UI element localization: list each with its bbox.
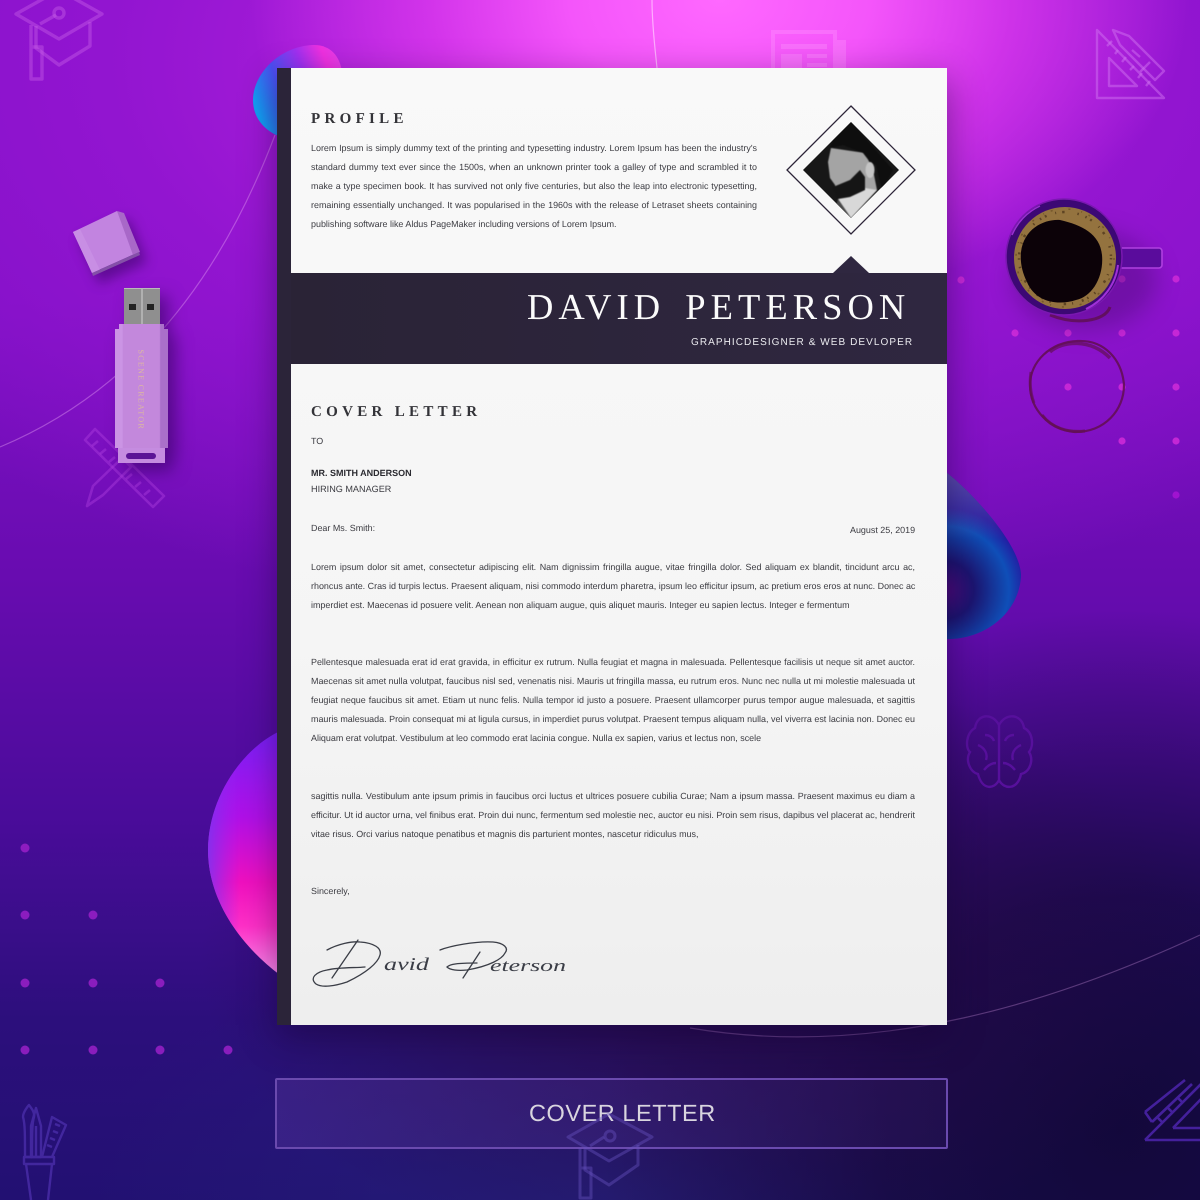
- mug handle: [1118, 248, 1162, 268]
- dark side strip: [277, 68, 291, 1025]
- USB body: [115, 324, 168, 448]
- letter paragraph 1: [311, 562, 916, 610]
- icon: set square and pencil top right: [1097, 30, 1164, 98]
- portrait: [786, 105, 916, 235]
- text: sagittis nulla. Vestibulum ante ipsum primis in faucibus orci luctus et ultrices posuere cubilia Curae; Nam a ipsum massa. Praesent maximus eu diam a: [311, 791, 915, 801]
- coffee ring stain: [1030, 341, 1124, 432]
- recipient block: MR. SMITH ANDERSON: [311, 468, 412, 478]
- date: August 25, 2019: [850, 525, 915, 535]
- recipient block: HIRING MANAGER: [311, 484, 391, 494]
- name: DAVID PETERSON: [527, 286, 910, 327]
- signature: eterson: [490, 956, 566, 975]
- icon: pencil cup: [23, 1105, 66, 1200]
- coffee crema: [1014, 207, 1116, 309]
- USB flash drive: [114, 287, 185, 480]
- icon: crossed ruler and pencil: [85, 429, 164, 507]
- text: Pellentesque malesuada erat id erat gravida, in efficitur ex rutrum. Nulla feugiat et magna in malesuada. Pellentesque facilisis ut neque sit amet auctor.: [311, 657, 915, 667]
- signature: avid: [384, 954, 430, 974]
- USB lanyard tab: [118, 448, 165, 463]
- USB brand label: SCENE CREATOR: [136, 350, 146, 430]
- text: remaining essentially unchanged. It was popularised in the 1960s with the release of Letraset sheets containing: [311, 200, 757, 210]
- name band: [291, 273, 947, 364]
- profile text: [311, 142, 757, 229]
- icon: graduation cap top left: [16, 0, 102, 79]
- icon: newspaper top: [771, 30, 846, 68]
- letter paragraph 2: [311, 657, 915, 743]
- profile heading: PROFILE: [311, 111, 408, 127]
- text: make a type specimen book. It has survived not only five centuries, but also the leap into electronic typesetting,: [311, 180, 757, 190]
- text: mauris malesuada. Proin consequat mi at ligula cursus, in imperdiet purus volutpat. Praesent tempus aliquam nulla, vel viverra est lacinia non. Donec eu: [311, 714, 915, 724]
- text: efficitur. Ut id auctor urna, vel finibus erat. Proin dui nunc, fermentum sed molestie nec, auctor eu nisi. Proin sem risus, dapibus vel placerat ac, hendrerit: [311, 810, 915, 820]
- coffee surface: [1021, 220, 1102, 303]
- background blob: right: [946, 472, 1021, 639]
- button label: COVER LETTER: [529, 1100, 716, 1126]
- paper: resume sheet: [277, 68, 947, 1025]
- icon: set square and pencil bottom right: [1145, 1080, 1200, 1140]
- text: Maecenas sit amet nulla volutpat, faucibus nisl sed, venenatis nisi. Mauris ut fringilla massa, eu rutrum eros. Nunc nec nulla ut mi molestie malesuada ut: [311, 676, 915, 686]
- letter paragraph 3: [311, 791, 915, 839]
- text: Lorem ipsum dolor sit amet, consectetur adipiscing elit. Nam dignissim fringilla augue, vitae fringilla dolor. Sed aliquam ex blandit, tincidunt arcu ac,: [311, 562, 915, 572]
- dot grid: upper right: [957, 275, 1180, 499]
- icon: brain: [967, 716, 1032, 787]
- text: Aliquam erat volutpat. Vestibulum at leo commodo erat lacinia congue. Nulla ex sapien, varius et lectus non, scele: [311, 733, 761, 743]
- recipient block: [311, 436, 412, 494]
- text: feugiat neque faucibus sit amet. Etiam ut nunc felis. Nulla tempor id justo a posuere. Praesent ullamcorper purus tempor augue malesuada, et sagittis: [311, 695, 915, 705]
- band arrow: [833, 256, 869, 273]
- title button: [275, 1078, 948, 1149]
- salutation: Dear Ms. Smith:: [311, 523, 375, 533]
- background blob: top left: [253, 45, 342, 135]
- background blob: lower left: [208, 731, 280, 975]
- text: Lorem Ipsum is simply dummy text of the printing and typesetting industry. Lorem Ipsum has been the industry's: [311, 142, 757, 152]
- mug rim: [1006, 199, 1122, 315]
- USB metal connector: [124, 288, 160, 326]
- dot grid: lower left: [20, 844, 232, 1054]
- job title: GRAPHICDESIGNER & WEB DEVLOPER: [691, 337, 913, 348]
- text: publishing software like Aldus PageMaker including versions of Lorem Ipsum.: [311, 218, 617, 228]
- text: standard dummy text ever since the 1500s, when an unknown printer took a galley of type and scrambled it to: [311, 162, 757, 172]
- sign-off: Sincerely,: [311, 886, 350, 896]
- text: rhoncus ante. Cras id turpis lectus. Praesent aliquam, nisi commodo interdum pharetra, ipsum leo efficitur ipsum, ac pretium eros eros at nunc. Donec ac: [311, 581, 915, 591]
- recipient block: TO: [311, 436, 323, 446]
- text: vitae risus. Orci varius natoque penatibus et magnis dis parturient montes, nascetur ridiculus mus,: [311, 829, 698, 839]
- cover letter heading: COVER LETTER: [311, 404, 481, 420]
- text: imperdiet est. Maecenas id posuere velit. Aenean non aliquam augue, quis aliquet mauris. Integer eu sapien lectus. Integer e fermentum: [311, 600, 850, 610]
